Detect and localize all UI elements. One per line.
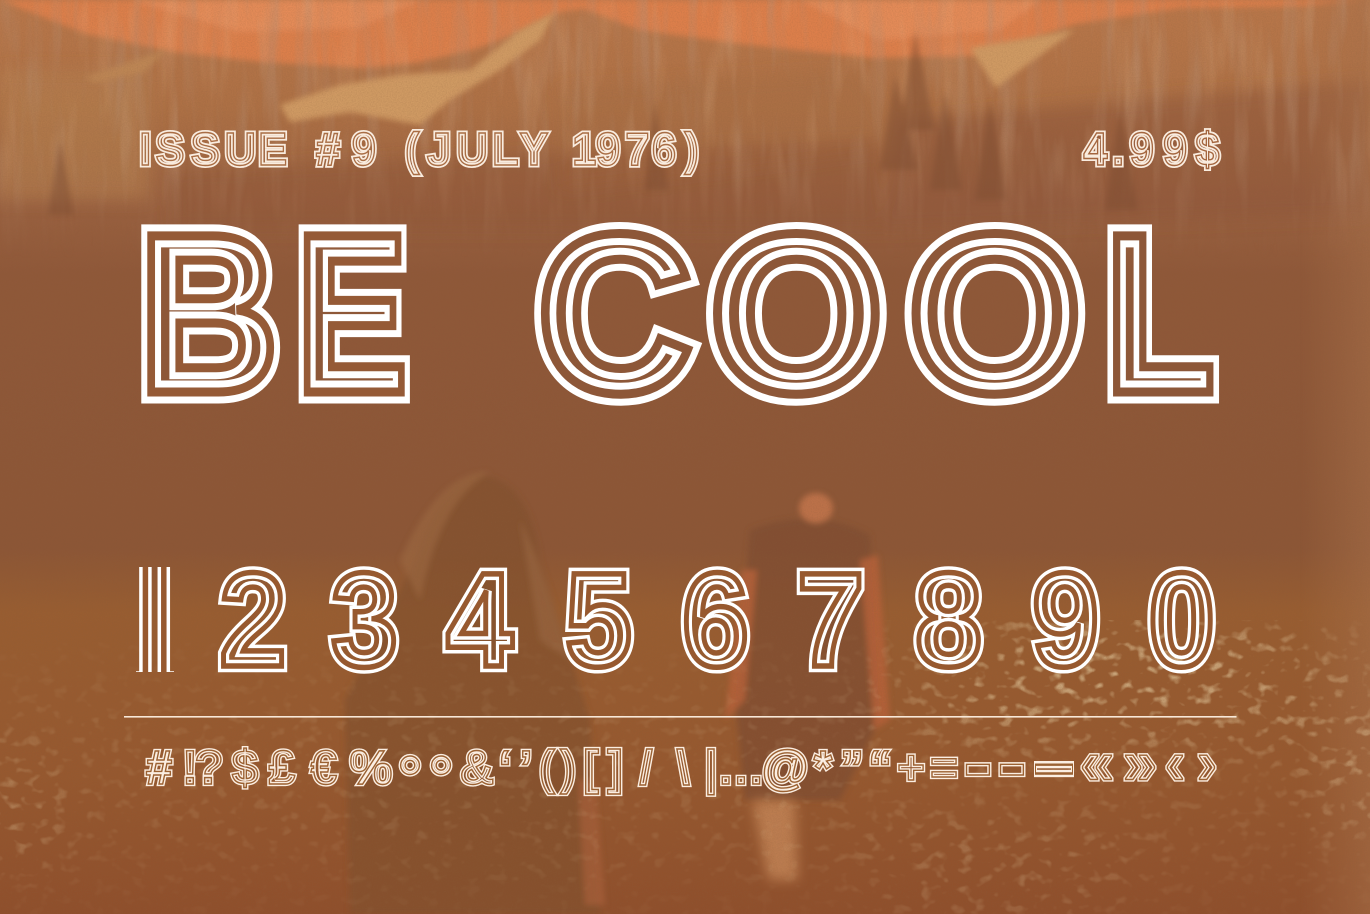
letter B: B [138,186,279,440]
letter E: E [296,187,408,441]
letter C: C [536,188,694,441]
lighter slopes and dark forest [1,84,1362,200]
degree signs: °° [398,744,453,811]
letter B: B [138,186,279,440]
letter C: C [536,188,694,441]
couple in silhouette [345,472,890,914]
divider rule [124,716,1236,718]
mountain glow [0,0,1370,68]
issue line: ISSUE #9 (JULY 1976) [139,123,699,175]
first letter O: O [708,188,885,441]
degree signs: °° [398,744,453,811]
price: 4.99$ [1083,123,1220,175]
right edge light band [1328,0,1370,914]
second letter O: O [907,188,1083,441]
letter L: L [1104,187,1215,441]
first letter O: O [708,188,885,441]
numerals row [136,566,1216,674]
vertical tree and rock streaks [0,0,1370,207]
guillemets: «»‹› [1080,729,1217,798]
hyphens: -- [963,713,1027,813]
second letter O: O [907,188,1083,441]
main symbols: #!?$£€%&‘’()[]/\|…@*”“+= [146,742,958,795]
dark conifers [48,30,1138,215]
letter L: L [1104,187,1215,441]
issue line: ISSUE #9 (JULY 1976) [139,123,699,175]
guillemets: «»‹› [1080,729,1217,798]
numerals 2 to 0: 234567890 [219,546,1215,695]
numerals 2 to 0: 234567890 [219,546,1215,695]
long dash: — [1036,713,1073,813]
meadow flowers [0,620,1370,914]
numeral 1: 1 [114,369,189,817]
punctuation and symbols row [146,713,1217,813]
price: 4.99$ [1083,123,1220,175]
man's legs [752,800,798,880]
snowfields [85,12,1075,125]
hyphens: -- [963,713,1027,813]
main symbols: #!?$£€%&‘’()[]/\|…@*”“+= [146,742,958,795]
numeral 1: 1 [114,369,189,817]
long dash: — [1036,713,1073,813]
letter E: E [296,187,408,441]
numeral 1 [136,567,174,672]
headline: BE COOL [138,186,1215,441]
